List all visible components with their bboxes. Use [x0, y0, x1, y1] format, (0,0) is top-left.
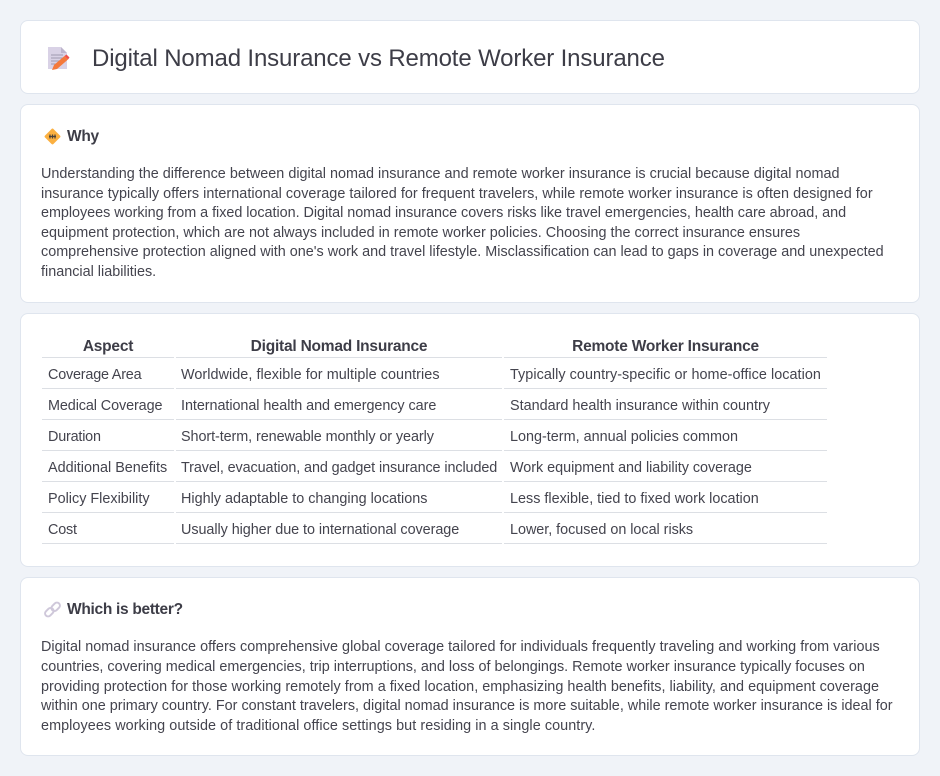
heading: which is better: Which is better?	[67, 601, 183, 618]
row: additional benefits: Additional Benefits	[48, 460, 167, 476]
text block: why: insurance typically offers international coverage tailored for frequent travelers, while remote worker insurance is often designed for	[41, 186, 873, 202]
text block: which is better: within one primary country. For constant travelers, digital nomad insurance is more suitable, while remote worker insurance is ideal for	[41, 698, 893, 714]
text block: why: equipment protection, which are not always included in remote worker policies. Choosing the correct insurance ensures	[41, 225, 800, 241]
row: duration	[48, 429, 738, 445]
row: cost	[48, 522, 693, 538]
text block: why: comprehensive protection aligned with one's work and travel lifestyle. Misclassification can lead to gaps in coverage and unexpected	[41, 244, 884, 260]
row: medical coverage: Medical Coverage	[48, 398, 162, 414]
table header: aspect: Aspect	[83, 338, 133, 355]
text block: which is better: employees working outside of traditional office settings but residing in a single country.	[41, 718, 595, 734]
text block: which is better: Digital nomad insurance offers comprehensive global coverage tailored for individuals frequently traveling and working from various	[41, 639, 880, 655]
table header: remote worker insurance: Remote Worker Insurance	[572, 338, 759, 355]
text block: which is better: countries, covering medical emergencies, trip interruptions, and loss of belongings. Remote worker insurance typically focuses on	[41, 659, 865, 675]
row: duration: Long-term, annual policies common	[510, 429, 738, 445]
icon: chain link	[44, 602, 61, 618]
row: additional benefits: Work equipment and liability coverage	[510, 460, 752, 476]
row: cost: Lower, focused on local risks	[510, 522, 693, 538]
text block: why: Understanding the difference between digital nomad insurance and remote worker insurance is crucial because digital nomad	[41, 166, 840, 182]
row: medical coverage: International health and emergency care	[181, 398, 436, 414]
icon: document with pencil	[48, 47, 70, 70]
row: policy flexibility	[48, 491, 759, 507]
row: cost: Cost	[48, 522, 77, 538]
title: Digital Nomad Insurance vs Remote Worker Insurance	[92, 45, 665, 72]
text block: which is better	[41, 639, 893, 734]
panel: comparison table	[20, 313, 920, 567]
row: cost: Usually higher due to international coverage	[181, 522, 459, 538]
row: medical coverage	[48, 398, 770, 414]
text block: which is better: providing protection for those working remotely from a fixed location, emphasizing health benefits, liability, and equipment coverage	[41, 679, 879, 695]
heading: why: Why	[67, 128, 99, 145]
row: coverage area: Worldwide, flexible for multiple countries	[181, 367, 440, 383]
row: policy flexibility: Less flexible, tied to fixed work location	[510, 491, 759, 507]
row: additional benefits	[48, 460, 752, 476]
icon: diamond sign	[44, 128, 60, 144]
text block: why: financial liabilities.	[41, 264, 156, 280]
row: policy flexibility: Policy Flexibility	[48, 491, 150, 507]
row: duration: Duration	[48, 429, 101, 445]
table header: digital nomad insurance: Digital Nomad Insurance	[251, 338, 427, 355]
row: coverage area: Coverage Area	[48, 367, 141, 383]
text block: why	[41, 166, 884, 280]
row: medical coverage: Standard health insurance within country	[510, 398, 770, 414]
panel: title card	[20, 20, 920, 94]
text block: why: employees working from a fixed location. Digital nomad insurance covers risks like travel emergencies, health care abroad, and	[41, 205, 846, 221]
row: policy flexibility: Highly adaptable to changing locations	[181, 491, 427, 507]
row: coverage area	[48, 367, 821, 383]
row: duration: Short-term, renewable monthly or yearly	[181, 429, 434, 445]
row: coverage area: Typically country-specific or home-office location	[510, 367, 821, 383]
panel: which is better	[20, 577, 920, 756]
row: additional benefits: Travel, evacuation, and gadget insurance included	[181, 460, 497, 476]
panel: why	[20, 104, 920, 303]
